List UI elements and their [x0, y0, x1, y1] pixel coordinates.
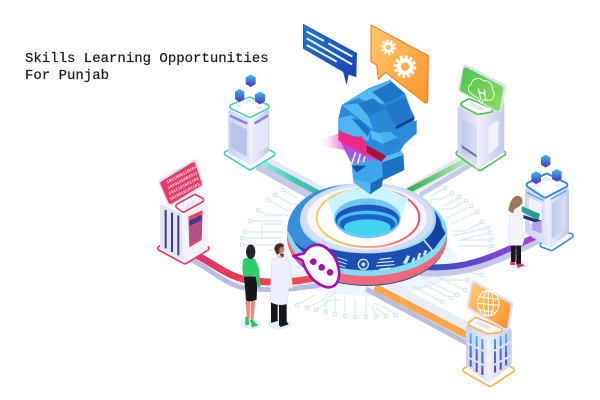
tower: data kiosk [160, 162, 207, 262]
icon: cubes [531, 155, 562, 184]
head made of blocks [320, 80, 417, 194]
connector: teal path to top-left tower [258, 157, 330, 203]
connector: purple path to laboratory tower [420, 236, 540, 273]
sign: binary data screen: 1010101001011 [167, 171, 199, 191]
title: For Punjab [25, 68, 109, 84]
sign: binary data screen: 1011101001101 [168, 176, 200, 197]
platform hole [334, 198, 401, 238]
connector: orange path to globe tower [366, 280, 470, 343]
platform status icons [336, 250, 427, 269]
light cone inside ring [327, 188, 408, 220]
sign: binary data screen [161, 162, 201, 203]
connector: red path to data tower [190, 252, 320, 290]
icon: cubes [235, 75, 265, 104]
pink glow [320, 133, 345, 150]
top ring [300, 183, 436, 253]
speech bubble: blue text [303, 24, 357, 84]
circuit board background [240, 186, 494, 319]
speech bubble: orange gears [371, 25, 428, 103]
tower: globe kiosk [465, 283, 512, 384]
tower: cloud kiosk [458, 67, 504, 168]
console [522, 206, 542, 233]
sign: globe screen [469, 283, 511, 328]
person: woman in green [241, 244, 261, 329]
speech bubble: magenta dots [293, 245, 339, 287]
icon: gears [382, 41, 415, 77]
icon: cloud [468, 78, 494, 103]
light beam under band [338, 137, 381, 168]
connector: green path to cloud tower [408, 156, 475, 195]
central platform [287, 183, 447, 286]
sign: binary data screen: 1010010101101 [169, 182, 201, 202]
sign: cloud screen [460, 67, 504, 110]
icon: globe [478, 291, 499, 316]
tower: top-left server with cubes [227, 75, 273, 168]
sign: binary data screen: 1011000110101 [166, 165, 198, 185]
pink band across head [338, 132, 386, 162]
speech bubbles [303, 24, 428, 103]
person: man in lab coat [267, 243, 293, 329]
tower: right server with cubes [527, 155, 571, 248]
lower jaw [352, 151, 404, 194]
title: Skills Learning Opportunities [25, 51, 269, 67]
title [25, 51, 269, 84]
person: woman at laboratory console [508, 196, 542, 269]
